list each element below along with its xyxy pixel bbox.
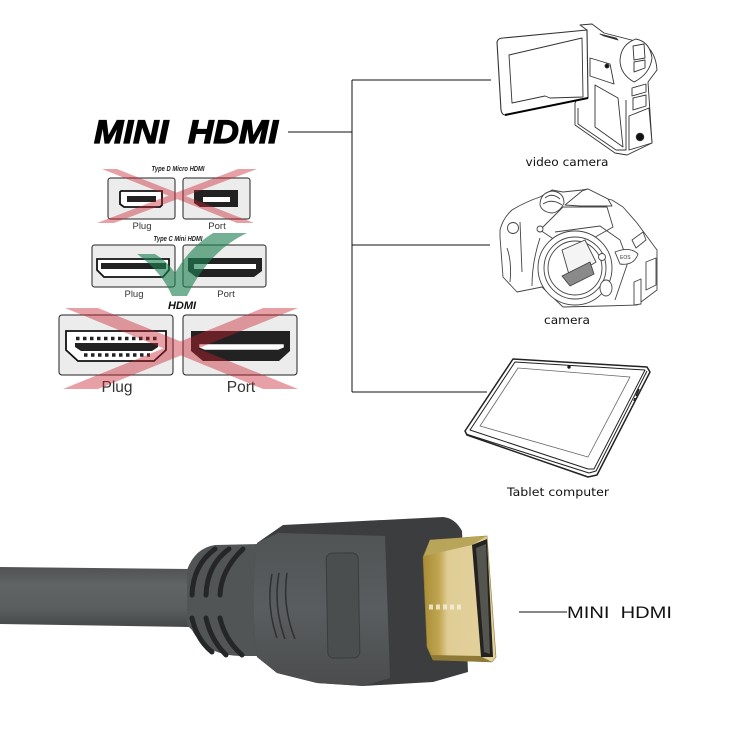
label: EOS: EOS xyxy=(620,255,631,261)
cross: HDMI rejected xyxy=(63,308,298,389)
label: Plug: Plug xyxy=(101,379,133,396)
panel: Type C port xyxy=(183,245,266,287)
connector body xyxy=(254,517,468,686)
cross: Type D rejected xyxy=(97,169,257,223)
cable xyxy=(0,567,190,627)
label: Tablet computer: Tablet computer xyxy=(506,485,609,499)
label: Port: Port xyxy=(208,221,226,232)
check mark: Type C correct xyxy=(137,233,247,296)
panel: HDMI plug xyxy=(59,315,173,375)
panel: Type C plug xyxy=(92,245,175,287)
icon: camera xyxy=(500,189,657,307)
recessed label area xyxy=(326,553,360,658)
icon: tablet computer xyxy=(465,359,650,477)
label: Port: Port xyxy=(227,379,256,396)
icon: video camera xyxy=(497,24,657,155)
connector lines to devices xyxy=(288,80,491,392)
label: Port: Port xyxy=(217,289,235,300)
label: video camera: video camera xyxy=(526,155,608,169)
photo: mini HDMI cable xyxy=(0,517,496,686)
title: MINI HDMI: MINI HDMI xyxy=(94,114,279,150)
label: Plug: Plug xyxy=(132,221,152,232)
gold plug xyxy=(423,536,496,662)
heading: Type C Mini HDMI: Type C Mini HDMI xyxy=(154,236,203,243)
callout: MINI HDMI: MINI HDMI xyxy=(567,603,672,622)
panel: Type D plug xyxy=(108,178,175,219)
label: camera: camera xyxy=(544,313,590,327)
heading: HDMI: HDMI xyxy=(168,300,197,312)
strain relief xyxy=(187,544,258,656)
label: Plug: Plug xyxy=(124,289,144,300)
connector type chart xyxy=(59,166,298,396)
panel: Type D port xyxy=(183,178,250,219)
body face xyxy=(254,533,390,686)
panel: HDMI port xyxy=(183,315,297,375)
heading: Type D Micro HDMI: Type D Micro HDMI xyxy=(152,166,205,173)
grip ridges xyxy=(270,573,295,639)
